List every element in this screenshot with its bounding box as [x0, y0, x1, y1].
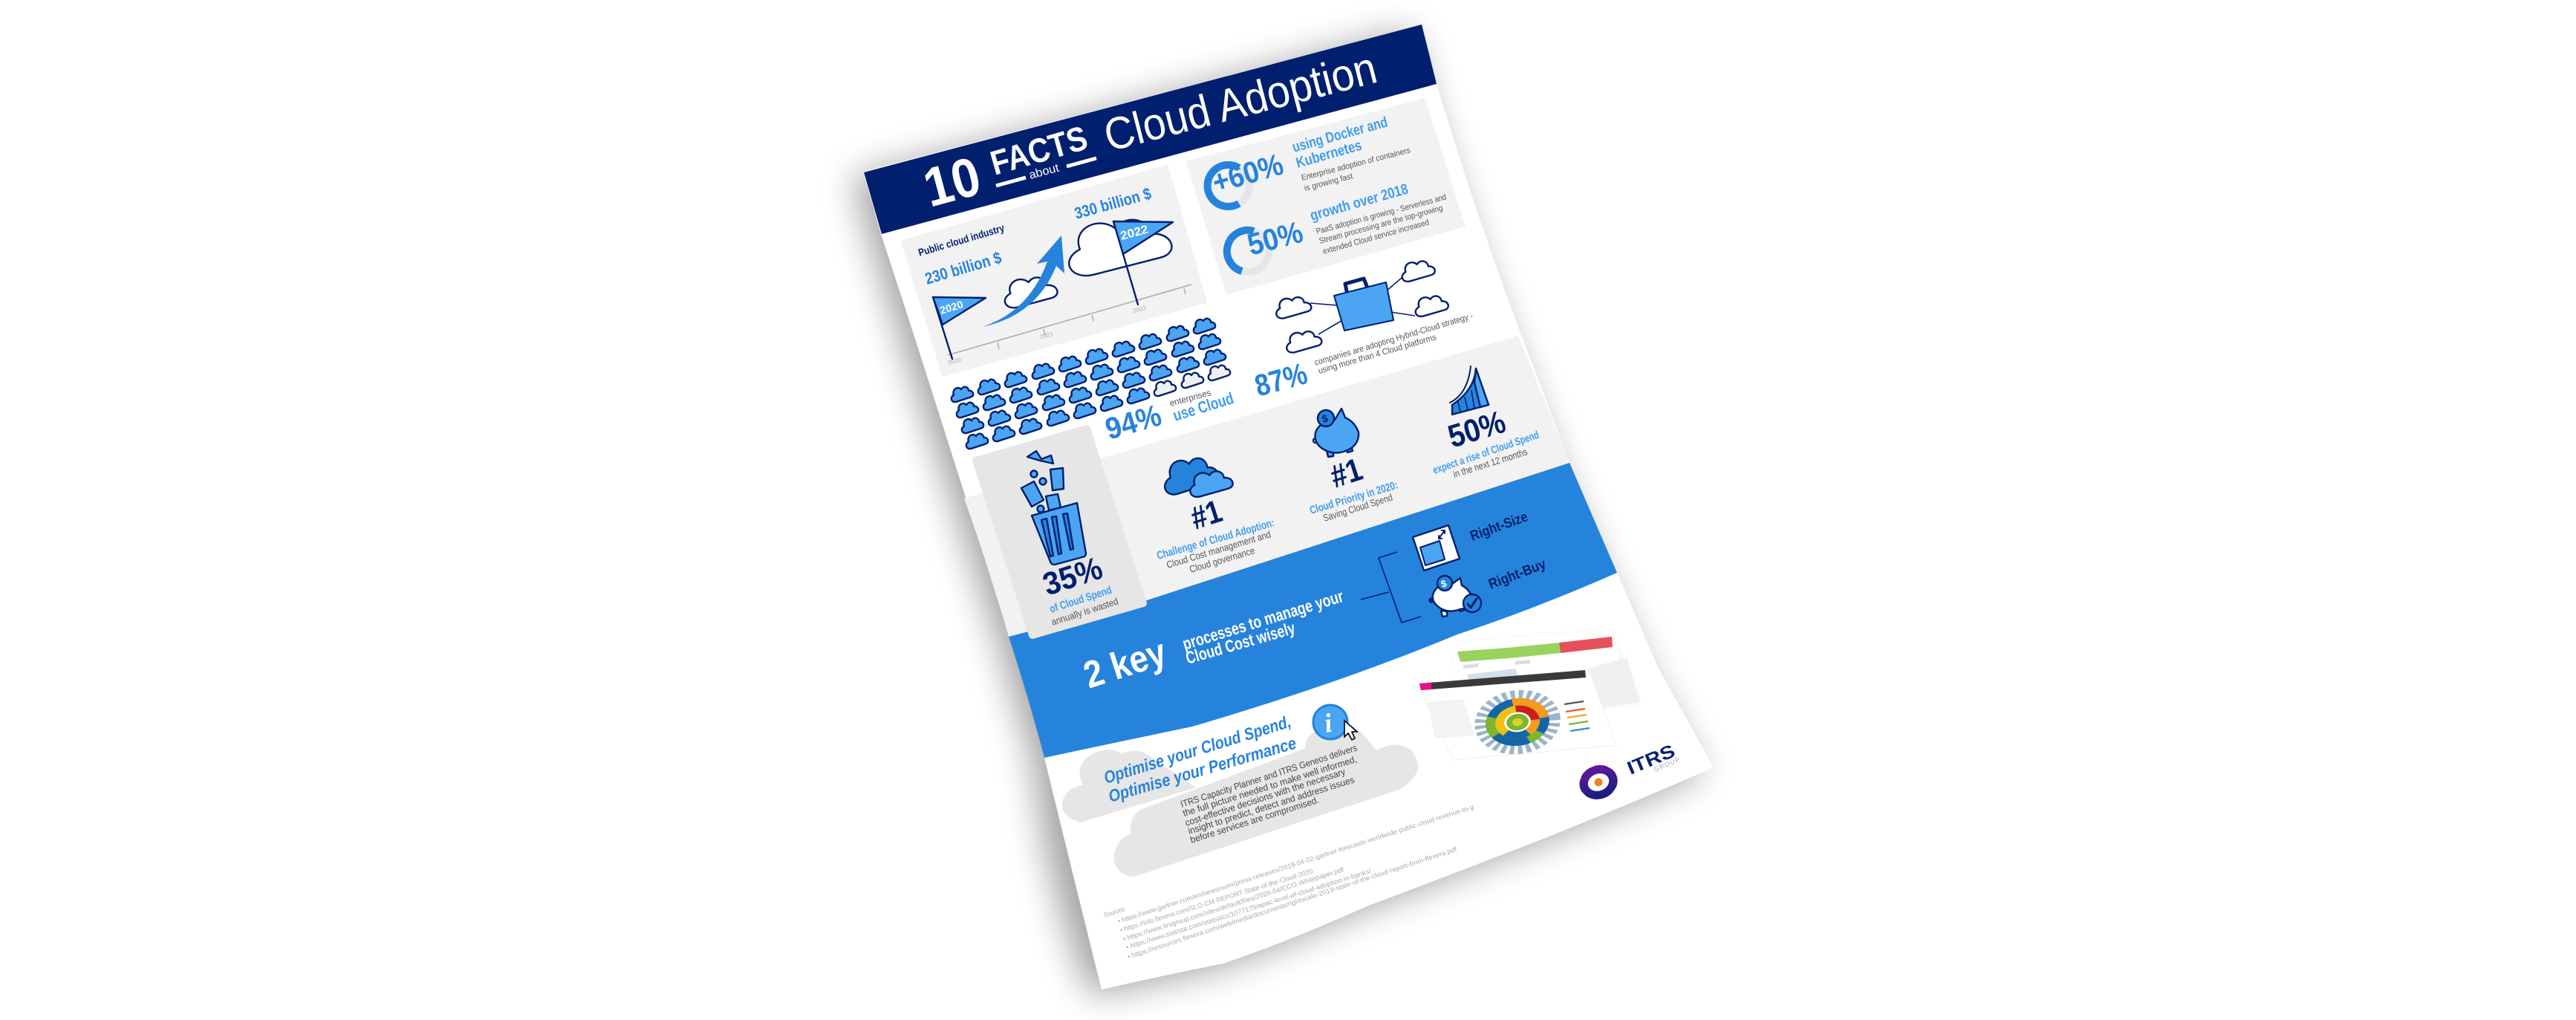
fact: rise of cloud spend: [1431, 366, 1541, 480]
heading: expect a rise: expect a rise of Cloud Spend: [1431, 429, 1541, 477]
text: containers: is growing fast: [1304, 172, 1354, 193]
title underline dashes: [996, 158, 1096, 186]
timeline axis: [947, 285, 1191, 366]
cloud pictogram grid: [949, 315, 1231, 449]
grey clouds backdrop: [1062, 724, 1418, 877]
text: ITRS description: the full picture needed to make well informed,: [1182, 754, 1359, 819]
panel: grey band: [964, 336, 1570, 637]
text: PaaS: PaaS adoption is growing - Serverless and: [1315, 192, 1448, 236]
stat: 35%: 35%: [1038, 550, 1107, 603]
stat: 230 billion: 230 billion $: [923, 248, 1004, 288]
stat: 50%: 50%: [1243, 215, 1307, 262]
title: Cloud Adoption: Cloud Adoption: [1099, 42, 1382, 161]
fact: challenge of cloud adoption: [1155, 451, 1276, 575]
text: containers: Enterprise adoption of containers: [1301, 146, 1411, 183]
text: 87 percent hybrid: using more than 4 Cloud platforms: [1317, 333, 1437, 376]
panel: blue band: [1009, 463, 1617, 758]
timeline axis: 2021: [1039, 331, 1054, 340]
label: right-buy: Right-Buy: [1486, 556, 1549, 593]
icon: clouds: [1272, 257, 1449, 354]
sources list: Sources:: [1103, 905, 1127, 919]
text: 87 percent hybrid: 87%: [1251, 356, 1311, 403]
heading: using Docker and Kubernetes: using Docker and: [1290, 114, 1390, 156]
sources list: • https://www.statista.com/statistics/1077175/apac-level-of-cloud-adoption-in-banks/: [1125, 867, 1372, 951]
stat: 330 billion: 330 billion $: [1073, 184, 1154, 223]
text: ITRS description: cost-effective decisions with the necessary: [1184, 766, 1347, 828]
heading: 2 key: 2 key: [1079, 630, 1171, 696]
timeline axis: 2020: [947, 357, 962, 366]
ring chart: 60 percent: [1208, 165, 1249, 207]
ring chart: 50 percent: [1227, 230, 1269, 272]
panel: public cloud industry: [902, 166, 1206, 375]
icon: two clouds: [1158, 451, 1235, 498]
text: 87 percent hybrid: [1251, 312, 1474, 403]
icon: right-size: [1413, 525, 1460, 571]
page shadow: [853, 30, 1703, 995]
callout: optimise heading: Optimise your Performance: [1106, 733, 1298, 806]
hybrid cloud diagram: [1272, 257, 1449, 354]
screenshot: dashboard: [1451, 630, 1640, 724]
text: next 12 months: in the next 12 months: [1451, 446, 1529, 480]
card: wasted cloud spend: [976, 429, 1143, 635]
timeline axis: 2022: [1132, 305, 1147, 314]
title: 10: 10: [917, 145, 987, 218]
text: PaaS: extended Cloud service increased: [1322, 218, 1430, 256]
heading: public cloud industry: Public cloud industry: [917, 221, 1006, 259]
text: PaaS: [1315, 192, 1448, 256]
text: processes: [1180, 586, 1346, 668]
text: 94 percent enterprises: enterprises: [1168, 387, 1212, 409]
text: of cloud spend: of Cloud Spend: [1048, 584, 1113, 616]
icon: small cloud: [998, 271, 1059, 310]
icon: flag 2022: 2022: [1119, 224, 1150, 243]
logo: ITRS group: [1576, 741, 1681, 803]
sources list: • https://resources.flexera.com/web/media/documents/rightscale-2019-state-of-the-cloud-report-from-flexera.pdf: [1127, 845, 1458, 961]
bracket connector: [1361, 552, 1421, 623]
heading: using Docker and Kubernetes: [1290, 114, 1390, 172]
page sheet: [863, 25, 1714, 990]
text: annually is wasted: annually is wasted: [1050, 596, 1119, 628]
stat: #1: #1: [1326, 452, 1367, 496]
stat: +60%: +60%: [1209, 147, 1287, 200]
icon: flag 2020: 2020: [938, 298, 965, 316]
text: 94 percent enterprises: use Cloud: [1171, 389, 1236, 425]
text: PaaS: Stream processing are the top-growing: [1318, 204, 1444, 246]
sources list: • https://info.flexera.com/SLO-CM-REPORT-State-of-the-Cloud-2020: [1119, 867, 1313, 934]
text: processes: Cloud Cost wisely: [1183, 618, 1298, 668]
icon: right-buy piggy: $: [1440, 577, 1448, 590]
heading: challenge: Challenge of Cloud Adoption:: [1155, 516, 1276, 562]
sources list: • https://www.itrsgroup.com/sites/default/files/2020-04/CCO-Whitepaper.pdf: [1122, 865, 1345, 943]
title: FACTS: FACTS: [986, 118, 1092, 183]
icon: piggy bank: $: [1321, 412, 1330, 425]
icon: piggy bank: [1313, 409, 1359, 457]
icon: flag 2020: [933, 297, 986, 359]
icon: ITRS gear: [1576, 761, 1621, 803]
icon: growth arrow: [982, 235, 1064, 327]
icon: trash with money: [1021, 451, 1086, 565]
title: about: about: [1028, 162, 1061, 182]
label: right-size: Right-Size: [1468, 509, 1530, 545]
heading: growth over 2018: growth over 2018: [1308, 181, 1410, 224]
text: 94 percent enterprises: 94%: [1102, 397, 1165, 446]
text: 87 percent hybrid: companies are adopting Hybrid-Cloud strategy -: [1313, 312, 1474, 368]
stat: 50%: 50%: [1444, 404, 1510, 455]
panel: containers and PaaS: [1186, 98, 1466, 295]
text: GROUP: GROUP: [1653, 756, 1681, 773]
icon: info cursor: i: [1322, 708, 1334, 738]
text: saving cloud spend: Saving Cloud Spend: [1321, 492, 1394, 524]
text: ITRS description: [1180, 743, 1359, 845]
heading: cloud priority: Cloud Priority in 2020:: [1308, 479, 1399, 517]
text: 94 percent enterprises: [1102, 387, 1236, 446]
icon: info cursor: [1313, 705, 1357, 740]
blue band content: [1079, 509, 1549, 696]
icon: big cloud: [1056, 208, 1175, 279]
text: ITRS description: ITRS Capacity Planner and ITRS Geneos delivers: [1180, 743, 1359, 810]
icon: flag 2022: [1113, 221, 1173, 305]
callout: optimise heading: Optimise your Cloud Spend,: [1102, 712, 1293, 787]
text: ITRS description: before services are compromised.: [1189, 795, 1320, 845]
header banner: [864, 25, 1437, 234]
text: cloud cost management: Cloud Cost management and: [1165, 528, 1272, 571]
fact: cloud priority: [1308, 409, 1399, 524]
heading: using Docker and Kubernetes: Kubernetes: [1294, 137, 1364, 172]
sources list: • https://www.gartner.com/en/newsroom/press-releases/2019-04-02-gartner-forecasts-worldwide-public-cloud-revenue-to-g: [1117, 803, 1474, 925]
stat: #1: #1: [1186, 493, 1226, 537]
text: ITRS: ITRS: [1624, 741, 1678, 779]
icon: suitcase: [1334, 279, 1393, 331]
screenshot: sunburst: [1419, 670, 1616, 760]
text: ITRS description: insight to predict, detect and address issues: [1187, 775, 1356, 837]
icon: rising chart: [1450, 366, 1489, 415]
text: processes: processes to manage your: [1180, 586, 1346, 654]
text: cloud cost management: Cloud governance: [1188, 545, 1256, 575]
icon: right-buy piggy: [1429, 576, 1481, 617]
